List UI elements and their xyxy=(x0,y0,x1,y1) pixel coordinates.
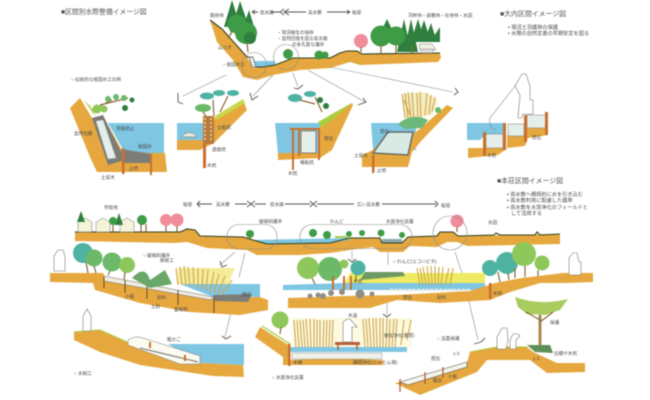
labels: top section: 既存林 xyxy=(210,12,224,19)
labels: middle section: 低水路 xyxy=(270,201,284,208)
title: section water's edge plan: ■区間別水際整備イメージ図 xyxy=(61,7,147,16)
leader lines with arrowheads: top section to details xyxy=(178,67,458,105)
labels: middle section: 広い高水敷 xyxy=(357,201,380,208)
panel: water purification facility xyxy=(255,312,415,381)
trees: right bank grove xyxy=(482,242,550,282)
detail outlines xyxy=(227,216,467,250)
panel: wando eco-habitat: 木杭 xyxy=(493,290,503,297)
trees: cherry on levee xyxy=(160,214,184,232)
tree: large shade tree xyxy=(515,297,568,353)
labels: middle section: 水田 xyxy=(488,219,498,226)
panel: wando eco-habitat: 木杭 xyxy=(353,278,363,285)
labels: top section: ・根固め工 xyxy=(222,61,245,68)
panel: slope protection: 小板 xyxy=(448,373,458,380)
labels: top section: ・自然回復を図る低水路 xyxy=(277,35,328,42)
panel: gentle slope revetment with willow: 柳枝工 xyxy=(160,257,174,264)
panel: gentle slope revetment with willow: 土砂 xyxy=(151,303,161,310)
panel: framed stone revetment: 柵板杭 xyxy=(300,159,314,166)
icon: person outline xyxy=(569,253,581,275)
panel: slope protection: 1:2 xyxy=(533,356,540,361)
panel: wando eco-habitat: 砂利 xyxy=(437,294,447,301)
trees: hillside forest xyxy=(224,0,257,52)
panel: water purification facility: 木柵 xyxy=(293,359,303,366)
labels: top section: ・現況植生の保存 xyxy=(277,29,314,36)
heading: Honjo section: して活用する xyxy=(511,209,542,217)
labels: middle section xyxy=(104,201,498,226)
panel: vertical stake revetment: 連接杭 xyxy=(212,146,226,153)
panel: vertical stake revetment xyxy=(177,90,247,169)
heading: Ouchi section: ■大内区間イメージ図 xyxy=(500,9,566,18)
panel: framed stone revetment xyxy=(275,91,353,177)
panel: gentle slope revetment with willow: 蓄根杭 xyxy=(174,306,188,313)
heading: Ouchi section: • 現況土羽護岸の保護 xyxy=(508,23,559,31)
panel: slope protection: 捨石 xyxy=(431,355,441,362)
panel: water purification facility: 木道 xyxy=(348,312,358,319)
panel: groyne with gabions xyxy=(74,309,244,377)
labels: middle section: 緩傾斜護岸 xyxy=(259,218,282,225)
panel: framed stone revetment: 捨石 xyxy=(324,135,334,142)
panel: reed bank with riprap xyxy=(354,92,453,174)
panel: water purification facility: 礫間浄化(じゃとん場) xyxy=(353,359,398,366)
panel: vertical stake revetment: 木杭 xyxy=(207,162,217,169)
labels: middle section: 高水敷 xyxy=(216,201,230,208)
trees: riparian forest xyxy=(370,19,440,53)
top river cross section xyxy=(210,0,441,80)
panel: slope protection xyxy=(395,297,585,395)
heading: Honjo section: ▪ 高水敷利用に配慮した護岸 xyxy=(507,196,573,204)
labels: top section: の多孔質な護岸 xyxy=(292,41,325,48)
panel: reed bank with riprap: 止杭 xyxy=(377,167,387,174)
labels: middle section: 水質浄化装置 xyxy=(386,218,414,225)
panel: natural stone revetment: 止杭 xyxy=(129,165,139,172)
panel: water purification facility: ○ 水質浄化装置 xyxy=(272,374,304,381)
panel: vertical stake revetment: 立板杭 xyxy=(217,124,231,131)
panel: gentle slope revetment with willow: 捨石 xyxy=(242,291,252,298)
panel: natural stone revetment: 根固め xyxy=(138,143,152,150)
panel: water purification facility: 植生浄化(葦原) xyxy=(384,332,415,339)
panel: wando eco-habitat: ○ わんど(エコハビタ) xyxy=(393,258,437,265)
labels: middle section: 市街地 xyxy=(104,204,118,211)
panel: natural stone revetment xyxy=(70,94,167,181)
tree: gentle slope revetment shrub xyxy=(246,230,254,239)
panel: gentle slope revetment with willow: ○ 緩傾斜護岸 xyxy=(143,252,170,259)
tree: cherry in detail circle xyxy=(450,214,464,232)
heading: Honjo section: ■本荘区間イメージ図 xyxy=(497,176,563,185)
icon: angler figure xyxy=(515,74,533,118)
panel: gentle slope revetment with willow: 小板 xyxy=(125,293,135,300)
trees: wando xyxy=(309,229,405,239)
panel: groyne with gabions: ○ 水制工 xyxy=(74,370,92,377)
labels: top section: 河畔林・屋敷林・社寺林・水田 xyxy=(408,12,473,19)
houses: urban area xyxy=(77,211,147,232)
panel: natural stone revetment: 洗掘防止 xyxy=(116,125,135,132)
panel: reed bank with riprap: 捨石 xyxy=(380,128,390,135)
heading: Ouchi section xyxy=(500,9,589,37)
panel: gentle slope revetment with willow: 砂利 xyxy=(157,294,167,301)
icon: person outline xyxy=(54,250,65,271)
labels: top section: 高水敷 xyxy=(308,9,322,16)
detail circles xyxy=(242,44,298,78)
panel: wando eco-habitat: 捨石 xyxy=(403,294,413,301)
icon: boardwalk with figures xyxy=(335,319,360,350)
icon: visitors outlines xyxy=(497,328,520,349)
heading: Honjo section: ▪ 高水敷を水質浄化のフィールドと xyxy=(507,203,588,211)
labels: top section: 桜堤 xyxy=(352,9,362,16)
labels: top section xyxy=(210,9,473,68)
labels: middle section: わんど xyxy=(330,218,344,225)
panel: stepped revetment with angler xyxy=(467,74,548,159)
panel: natural stone revetment: 土留木 xyxy=(101,174,115,181)
panel: stepped revetment with angler: 木杭 xyxy=(487,152,497,159)
leader lines with arrowheads: middle section to details xyxy=(220,251,485,344)
labels: top section: 山つき xyxy=(218,44,232,51)
panel: reed bank with riprap: 土留木 xyxy=(354,152,368,159)
tree: cherry on levee xyxy=(354,34,368,52)
trees: bank grove xyxy=(73,243,135,280)
heading: Ouchi section: • 水際の自然定着の早期安定を図る xyxy=(508,29,589,37)
panel: stepped revetment with angler: 捨石 xyxy=(532,134,542,141)
arrows: top width scale xyxy=(252,9,350,15)
heading: Honjo section xyxy=(497,176,588,217)
icon: person outline xyxy=(83,309,91,331)
labels: middle section: 桜堤 xyxy=(183,201,193,208)
panel: slope protection: 1:3 xyxy=(453,351,460,356)
panel: groyne with gabions: 粗かご xyxy=(167,336,181,343)
labels: top section: 低水路 xyxy=(260,9,274,16)
heading: Honjo section: ▪ 高水敷へ積極的に水を引き込む xyxy=(507,190,583,198)
arrows: middle width scale xyxy=(197,201,438,207)
panel: slope protection: 石積や木杭 xyxy=(554,350,577,357)
panel: slope protection: 粗朶 xyxy=(433,377,443,384)
panel: natural stone revetment: 自然石積 xyxy=(74,130,93,137)
label: traditional revetment: ○ 伝統的な根固め工の例 xyxy=(71,76,121,83)
panel: framed stone revetment: 木杭 xyxy=(288,170,298,177)
labels: middle section: 桜堤 xyxy=(441,202,451,209)
trees: low-water channel shrubs xyxy=(283,49,328,60)
panel: slope protection: ○ 法面保護 xyxy=(437,335,460,342)
middle river cross section xyxy=(75,211,560,255)
panel: gentle slope revetment with willow xyxy=(50,243,268,315)
trees: wando grove xyxy=(297,257,405,290)
panel: slope protection: 保護 xyxy=(550,319,560,326)
panel: wando eco-habitat xyxy=(283,242,593,308)
icon: house xyxy=(419,44,436,53)
